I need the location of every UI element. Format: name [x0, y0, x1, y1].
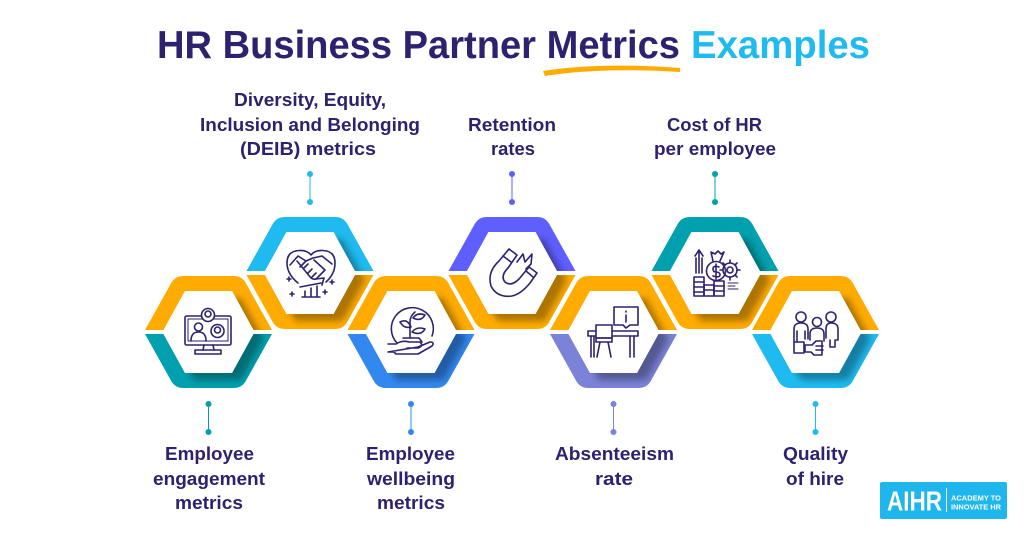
icon: monitor with people: [185, 308, 231, 354]
label: cost of HR: Cost of HR: [667, 114, 762, 135]
label: cost of HR: per employee: [654, 138, 776, 159]
label: retention: [468, 114, 556, 159]
connector: absenteeism: [610, 401, 616, 435]
label: retention: rates: [491, 138, 535, 159]
connector: employee engagement: [206, 401, 212, 435]
icon: money bag, coins, gear: [694, 250, 740, 296]
label: DEIB: Inclusion and Belonging: [200, 114, 420, 135]
label: DEIB: [200, 89, 420, 159]
connector: wellbeing: [408, 401, 414, 435]
connector: quality of hire: [812, 401, 818, 435]
label: absenteeism: [555, 443, 674, 489]
label: employee engagement: engagement: [153, 468, 265, 489]
logo: AIHR: [880, 482, 1007, 519]
label: quality of hire: [783, 443, 849, 489]
icon: heart handshake with chart: [287, 250, 335, 297]
label: employee wellbeing: wellbeing: [366, 468, 455, 489]
title: Examples: [691, 24, 870, 67]
hexagon: quality of hire: [752, 276, 879, 388]
connector: DEIB: [307, 171, 313, 205]
title: HR Business Partner Metrics: [157, 24, 680, 67]
hexagon: employee engagement: [145, 276, 272, 388]
title underline swoosh: [543, 66, 680, 76]
logo: AIHR: INNOVATE HR: [951, 502, 1002, 512]
connector: cost of HR: [712, 171, 718, 205]
label: DEIB: Diversity, Equity,: [234, 89, 386, 110]
label: absenteeism: rate: [595, 468, 633, 489]
icon: three people with thumbs up: [794, 312, 838, 355]
label: employee wellbeing: [366, 443, 455, 513]
label: employee engagement: metrics: [175, 492, 243, 513]
label: cost of HR: [654, 114, 776, 159]
label: DEIB: (DEIB) metrics: [240, 138, 376, 159]
hexagon: absenteeism: [550, 276, 677, 388]
hexagon: cost of HR: [652, 217, 778, 329]
label: absenteeism: Absenteeism: [555, 443, 674, 464]
label: quality of hire: Quality: [783, 443, 849, 464]
icon: magnet: [490, 249, 537, 296]
label: employee wellbeing: Employee: [366, 443, 455, 464]
icon: plant in hand: [388, 308, 433, 354]
hexagon: retention: [448, 217, 576, 329]
connector: retention: [509, 171, 515, 205]
logo: AIHR: AIHR: [887, 486, 942, 516]
logo: AIHR: ACADEMY TO: [951, 494, 1001, 502]
label: retention: Retention: [468, 114, 556, 135]
label: employee engagement: Employee: [165, 443, 254, 464]
hexagon: employee wellbeing: [348, 276, 474, 388]
icon: desk with info bubble: [588, 307, 638, 357]
label: employee engagement: [153, 443, 265, 513]
label: employee wellbeing: metrics: [377, 492, 445, 513]
label: quality of hire: of hire: [786, 468, 844, 489]
hexagon: DEIB: [246, 217, 374, 329]
